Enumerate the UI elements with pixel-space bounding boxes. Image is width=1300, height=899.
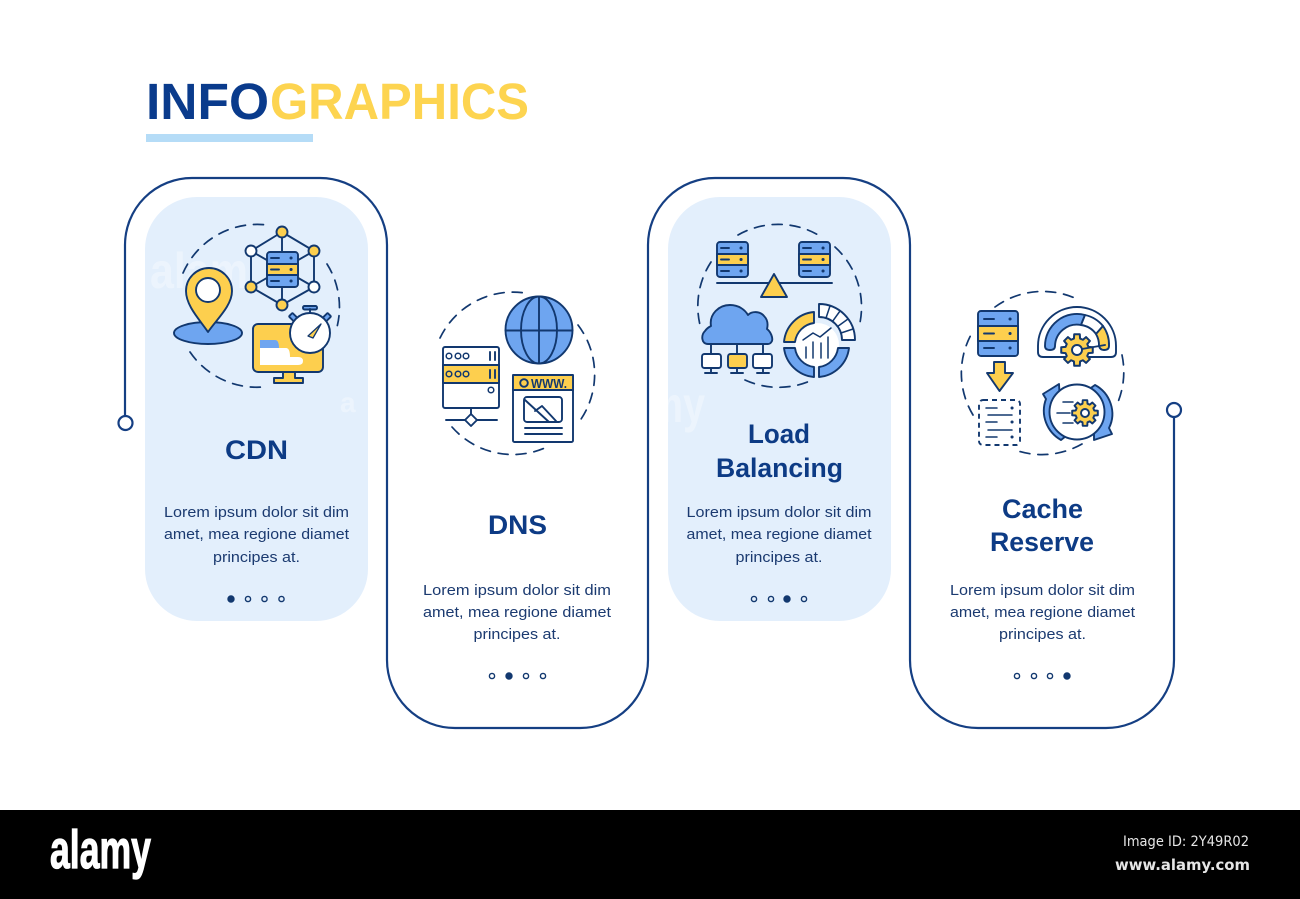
balance scale with servers — [717, 242, 832, 297]
panel: Load Balancing background — [668, 197, 891, 621]
web page: WWW. — [531, 377, 567, 391]
server — [443, 347, 499, 426]
text block: CDN — [164, 504, 350, 566]
watermark traces: alam — [150, 243, 248, 299]
pagination dots: Cache Reserve — [1014, 673, 1070, 679]
heading: Cache Reserve: Cache — [1002, 494, 1083, 524]
web page — [513, 375, 573, 442]
text block: CDN: principes at. — [213, 549, 300, 566]
text block: Load Balancing: amet, mea regione diamet — [686, 526, 872, 543]
monitor with stopwatch — [253, 306, 331, 383]
icon: DNS — [440, 292, 595, 455]
watermark traces: my — [648, 377, 705, 433]
text block: Cache Reserve — [950, 582, 1136, 643]
heading: Cache Reserve — [990, 494, 1094, 557]
watermark traces: a — [340, 387, 356, 418]
heading: CDN: CDN — [225, 435, 288, 465]
down arrow — [987, 362, 1013, 391]
text block: DNS: amet, mea regione diamet — [423, 604, 612, 621]
pagination dots: Load Balancing — [751, 596, 807, 602]
dashed ring — [183, 224, 339, 387]
heading: Load Balancing: Load — [748, 419, 810, 449]
text block: Cache Reserve: Lorem ipsum dolor sit dim — [950, 582, 1135, 599]
text block: DNS: Lorem ipsum dolor sit dim — [423, 582, 611, 599]
stock footer bar — [0, 810, 1300, 899]
heading: DNS: DNS — [488, 510, 547, 540]
pagination dots: DNS — [489, 673, 546, 679]
title: GRAPHICS — [270, 73, 529, 130]
watermark traces — [150, 243, 705, 433]
donut chart — [784, 304, 855, 377]
footer logo: alamy — [50, 820, 151, 880]
title — [146, 73, 529, 130]
text block: Cache Reserve: principes at. — [999, 626, 1086, 643]
gauge with gear — [1038, 307, 1116, 366]
icon: CDN — [174, 224, 339, 387]
network with server — [246, 226, 320, 310]
text block: DNS — [423, 582, 612, 643]
server — [978, 311, 1018, 356]
title: INFO — [146, 73, 269, 130]
title underline — [146, 134, 313, 142]
dashed cache list — [979, 400, 1020, 445]
footer url: www.alamy.com — [1115, 856, 1250, 874]
dashed ring — [440, 292, 595, 455]
text block: CDN: Lorem ipsum dolor sit dim — [164, 504, 349, 521]
dashed ring — [698, 224, 862, 387]
text block: Cache Reserve: amet, mea regione diamet — [950, 604, 1136, 621]
text block: Load Balancing: principes at. — [736, 549, 822, 566]
heading: Load Balancing — [716, 419, 843, 483]
heading: Cache Reserve: Reserve — [990, 527, 1094, 557]
text block: CDN: amet, mea regione diamet — [164, 526, 350, 543]
continuous outline connecting panels — [118, 178, 1181, 728]
text block: Load Balancing — [686, 504, 872, 566]
refresh cycle with gear — [1043, 384, 1112, 440]
dashed ring — [961, 291, 1124, 455]
pagination dots: CDN — [228, 596, 284, 602]
image id: Image ID: 2Y49R02 — [1123, 834, 1249, 850]
cloud network — [702, 305, 772, 373]
text block: Load Balancing: Lorem ipsum dolor sit dim — [686, 504, 872, 521]
heading: Load Balancing: Balancing — [716, 453, 843, 483]
globe — [506, 296, 572, 364]
icon: Load Balancing — [698, 224, 862, 387]
text block: DNS: principes at. — [474, 626, 560, 643]
icon: Cache Reserve — [961, 291, 1124, 455]
location pin — [174, 268, 242, 344]
panel: CDN background — [145, 197, 368, 621]
